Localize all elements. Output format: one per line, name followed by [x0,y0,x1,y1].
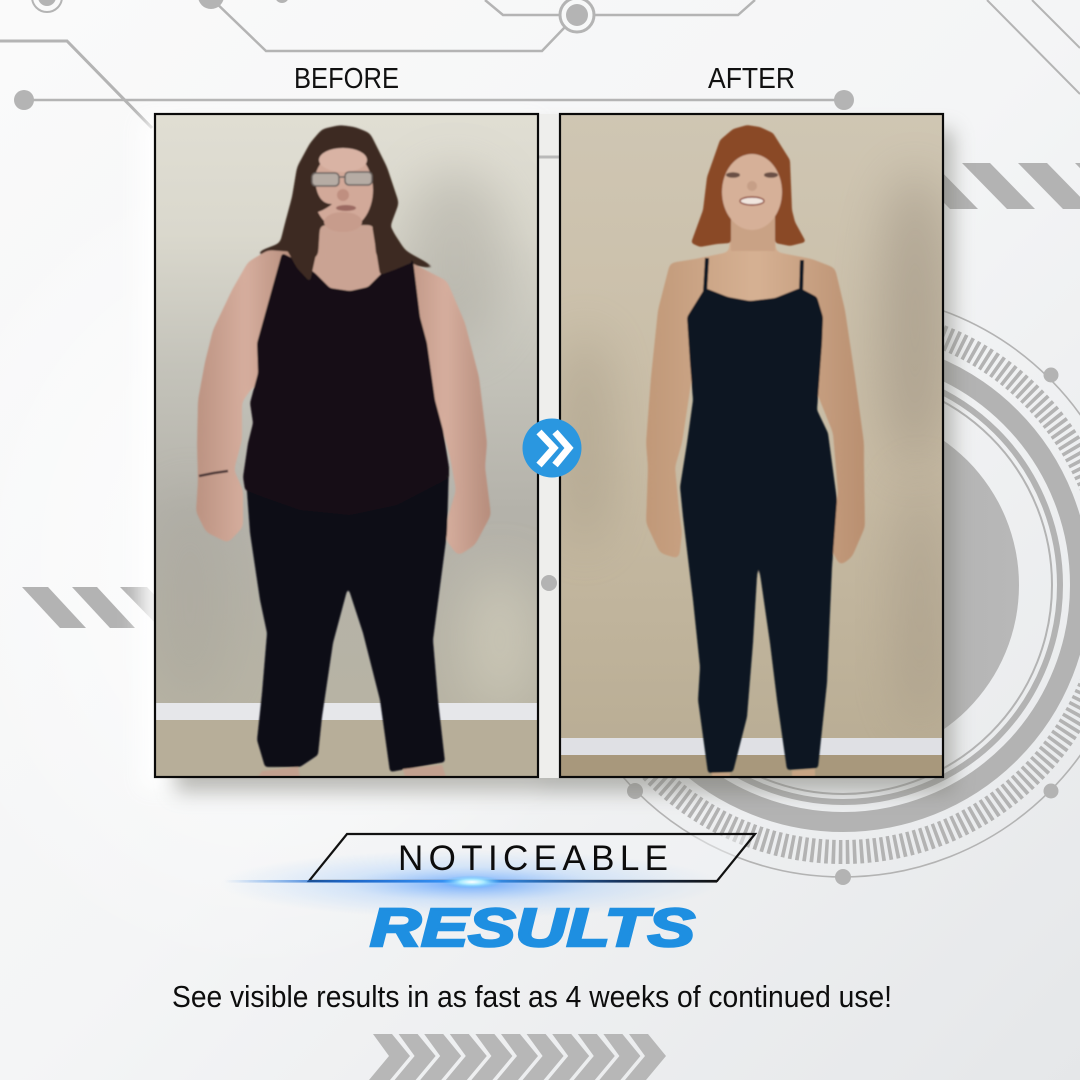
before photo [145,114,538,777]
wall [560,114,950,777]
before label: BEFORE [294,63,399,95]
stripes: left [22,587,185,628]
after label: AFTER [708,63,795,95]
arrow button [522,418,582,478]
stripes: right [905,163,1080,209]
photo frames [155,114,943,777]
noticeable badge [220,834,755,918]
concentric circle graphic [551,293,1080,885]
wall [145,114,538,777]
circuit lines [0,0,1080,128]
hair: after [691,125,806,247]
subtitle: See visible results in as fast as 4 weeks of continued use! [172,979,892,1014]
neck: after [731,215,775,251]
tank: before [243,253,449,515]
face: after [722,154,782,230]
noticeable text: NOTICEABLE [398,839,668,878]
tank and leggings: after [680,288,837,773]
chevron row [369,1034,666,1080]
pants: before [245,465,449,772]
face: before [312,148,373,232]
figure: after [646,125,865,777]
photo shadow [140,114,953,792]
results heading: RESULTS [370,898,695,958]
after photo [560,114,950,777]
figure: before [196,125,491,777]
